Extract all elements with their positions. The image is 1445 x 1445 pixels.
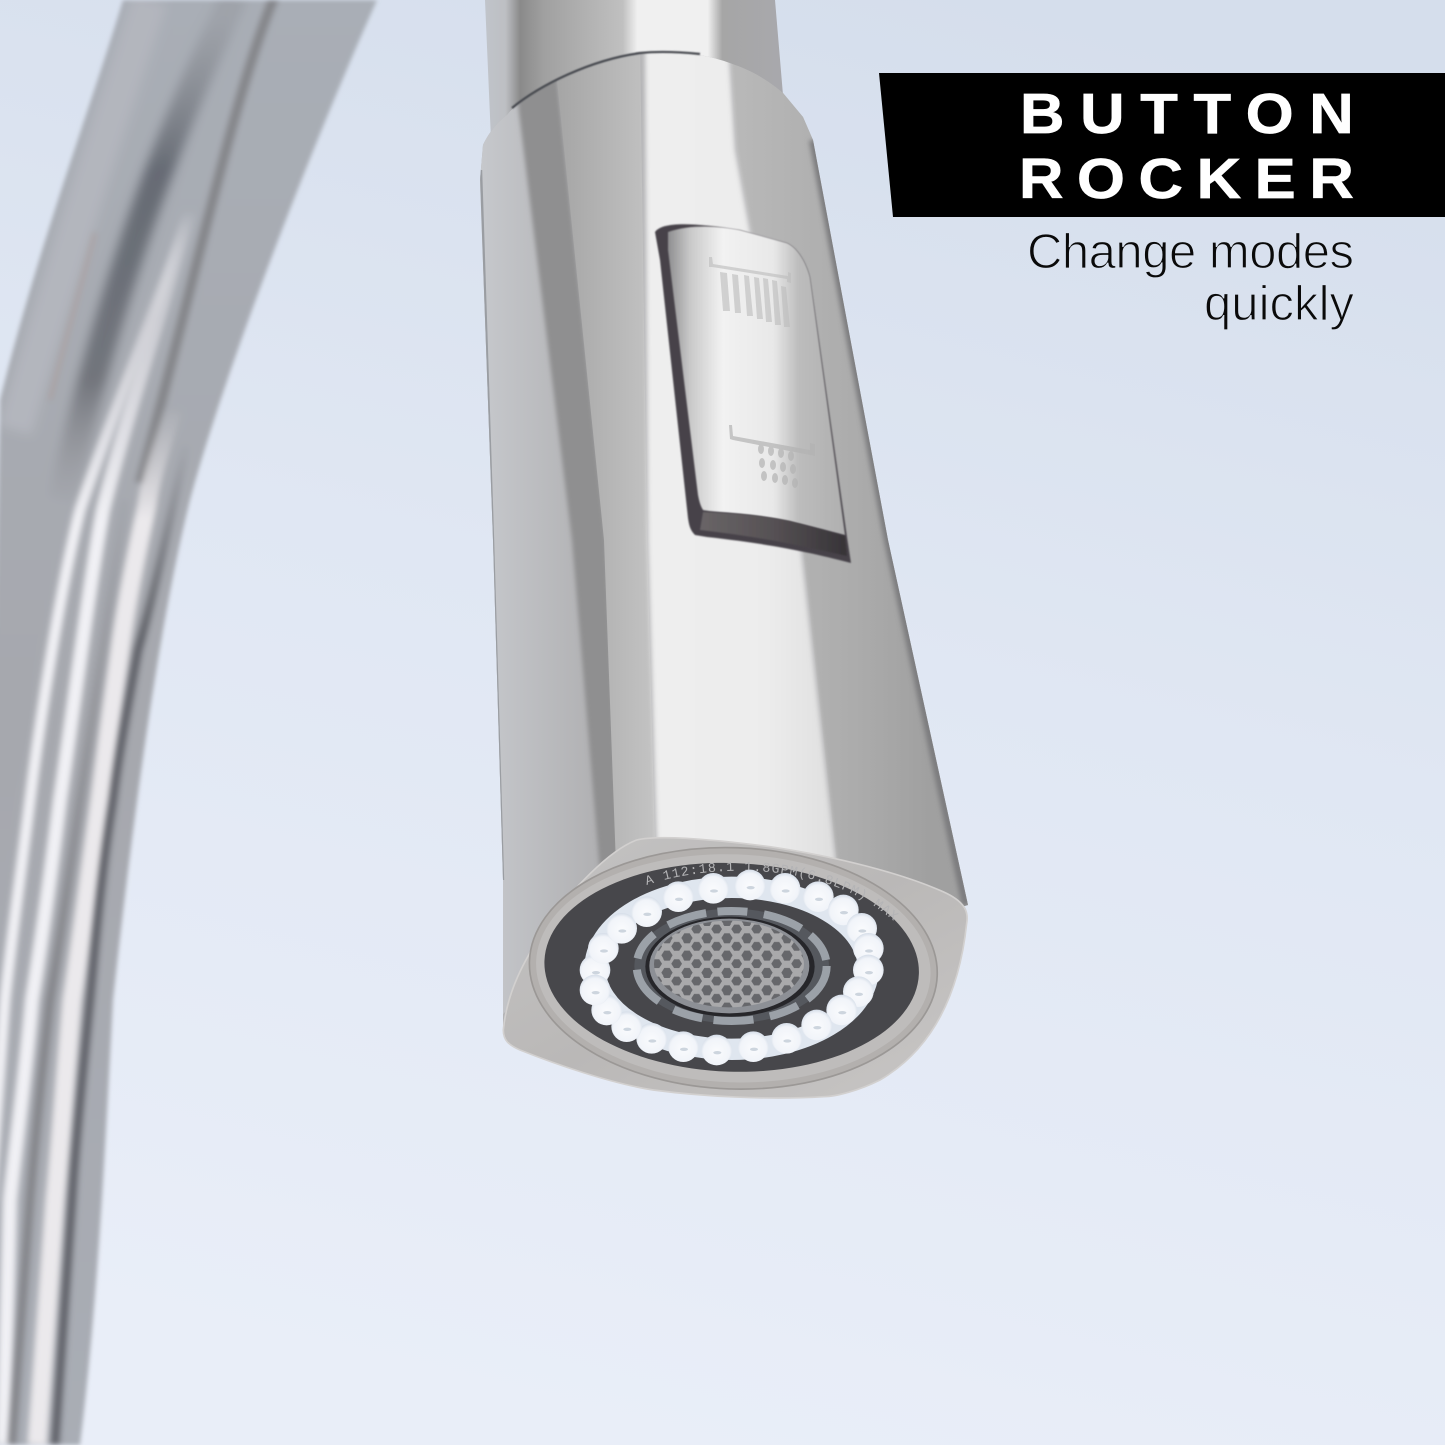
engraved flow rating: A 112:18.1 1.8GPM(6.8LPM) MAX xyxy=(646,862,898,921)
subtitle: quickly xyxy=(1204,277,1354,331)
neck of spray head xyxy=(485,0,783,140)
black banner xyxy=(879,73,1445,217)
spray head body xyxy=(470,40,975,1040)
collar seam xyxy=(512,52,700,108)
icon: stream spray mode xyxy=(709,257,791,327)
spray face xyxy=(502,837,968,1099)
metal rim xyxy=(503,838,967,1098)
button recess xyxy=(655,224,851,563)
rocker button xyxy=(655,224,851,563)
callout xyxy=(879,73,1445,331)
honeycomb screen xyxy=(654,921,804,1007)
icon: spray dots mode xyxy=(729,425,815,488)
heading: button rocker: BUTTON xyxy=(1020,81,1354,145)
subtitle: Change modes xyxy=(1027,225,1354,279)
centre aerator xyxy=(634,909,829,1023)
heading: button rocker xyxy=(1019,81,1354,210)
button face xyxy=(668,226,845,535)
dark nozzle plate xyxy=(541,857,923,1078)
faucet arc xyxy=(0,0,400,1445)
nozzle beads xyxy=(580,870,884,1065)
heading: button rocker: ROCKER xyxy=(1019,146,1354,210)
subtitle xyxy=(1027,225,1354,331)
